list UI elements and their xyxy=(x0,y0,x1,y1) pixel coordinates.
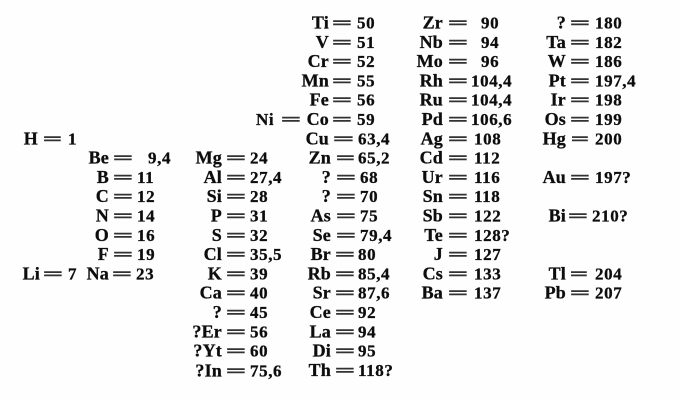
entry: Cl xyxy=(204,244,282,264)
entry: Ti: = xyxy=(332,14,352,32)
entry: F: F xyxy=(98,244,109,264)
entry: C xyxy=(96,186,155,206)
entry: W xyxy=(548,51,622,71)
entry: Ca: Ca xyxy=(200,283,222,303)
entry: Ag: = xyxy=(448,129,468,148)
entry: Na: = xyxy=(112,264,132,283)
entry: Ru: 104,4 xyxy=(471,91,512,110)
entry: Br xyxy=(311,244,376,264)
entry: S: = xyxy=(226,226,246,245)
entry: Li: Li xyxy=(23,263,40,283)
entry: N: N xyxy=(96,206,109,226)
entry: Co xyxy=(307,109,375,129)
entry: Rh: = xyxy=(448,71,468,90)
entry: Ce: 92 xyxy=(358,303,376,322)
entry: ? 180: 180 xyxy=(595,14,622,32)
entry: Pd xyxy=(422,109,512,129)
entry: Tl: Tl xyxy=(549,263,566,283)
entry: Os: Os xyxy=(545,109,566,129)
entry: Ti xyxy=(312,12,375,32)
entry: B: 11 xyxy=(137,168,154,187)
entry: K: = xyxy=(226,264,246,283)
entry: Te xyxy=(424,225,510,245)
entry: J xyxy=(434,244,501,264)
entry: Hg: 200 xyxy=(595,129,622,148)
entry: Ir xyxy=(551,90,622,110)
column: H and Li xyxy=(23,128,77,283)
entry: Ba: = xyxy=(448,284,468,303)
entry: Pt: Pt xyxy=(549,70,566,90)
entry: ? 45: = xyxy=(226,303,246,322)
entry: Ba: Ba xyxy=(422,283,443,303)
entry: Ir: 198 xyxy=(595,91,622,110)
entry: H: = xyxy=(43,129,62,148)
entry: Mn xyxy=(302,70,375,90)
entry: K xyxy=(208,263,268,283)
entry: Tl: = xyxy=(570,264,588,283)
entry: C: 12 xyxy=(137,187,155,206)
entry: Te: Te xyxy=(424,225,443,245)
entry: Ru: = xyxy=(448,91,468,110)
entry: Mg xyxy=(196,148,268,168)
entry: Cu: Cu xyxy=(306,128,329,148)
entry: Fe: = xyxy=(332,91,352,110)
entry: Zr: = xyxy=(448,14,468,32)
entry: K: K xyxy=(208,263,222,283)
entry: J: J xyxy=(434,244,443,264)
entry: K: 39 xyxy=(250,264,268,283)
entry: ? 45 xyxy=(213,302,268,322)
entry: Rh: Rh xyxy=(420,70,443,90)
entry: Na xyxy=(87,263,154,283)
entry: La: La xyxy=(310,321,331,341)
entry: Bi xyxy=(549,206,628,226)
column: Ti to Th xyxy=(302,12,393,380)
entry: Sr: Sr xyxy=(313,283,331,303)
entry: Ta: 182 xyxy=(595,33,622,52)
entry: Rb: Rb xyxy=(308,263,331,283)
entry: As: As xyxy=(311,206,331,226)
entry: Cr: = xyxy=(332,52,352,71)
entry: V xyxy=(316,32,375,52)
entry: ?Yt: = xyxy=(226,342,246,361)
entry: ? 70: 70 xyxy=(360,187,378,206)
entry: Nb: = xyxy=(448,33,468,52)
entry: W: 186 xyxy=(595,52,622,71)
entry: Pd: = xyxy=(448,110,468,129)
entry: Al: Al xyxy=(204,167,222,187)
entry: Sn: Sn xyxy=(423,186,443,206)
entry: J: = xyxy=(448,245,468,264)
entry: Tl: 204 xyxy=(595,264,622,283)
entry: Mg: = xyxy=(226,149,246,168)
entry: C: C xyxy=(96,186,109,206)
entry: ?In: = xyxy=(226,362,246,380)
entry: Rb: 85,4 xyxy=(358,264,390,283)
entry: J: 127 xyxy=(474,245,501,264)
entry: Li: = xyxy=(43,264,63,283)
entry: Tl xyxy=(549,263,622,283)
entry: Cd: Cd xyxy=(420,148,443,168)
entry: Rb: = xyxy=(335,264,355,283)
entry: Al xyxy=(204,167,282,187)
entry: Na: Na xyxy=(87,263,109,283)
entry: Ir: Ir xyxy=(551,90,566,110)
entry: Mo: = xyxy=(448,52,468,71)
entry: H: 1 xyxy=(68,129,77,148)
entry: Fe: 56 xyxy=(357,91,375,110)
entry: Ca xyxy=(200,283,268,303)
entry: V: = xyxy=(332,33,352,52)
entry: Cu xyxy=(306,128,390,148)
entry: Th: = xyxy=(335,361,355,380)
entry: ?Yt: ?Yt xyxy=(193,341,222,361)
column: Mg to In xyxy=(192,148,282,380)
entry: Hg: = xyxy=(571,129,589,148)
entry: Ta: = xyxy=(570,33,590,52)
entry: Ur: 116 xyxy=(474,168,500,187)
entry: As: 75 xyxy=(360,206,378,226)
entry: B: = xyxy=(113,168,133,187)
entry: Pb: = xyxy=(570,284,590,303)
entry: Be: 9,4 xyxy=(148,149,171,168)
entry: Sn xyxy=(423,186,500,206)
entry: Mo: Mo xyxy=(417,51,443,71)
entry: Pt: = xyxy=(570,71,590,90)
entry: Be: = xyxy=(113,149,133,168)
entry: Mo xyxy=(417,51,499,71)
entry: B: B xyxy=(97,167,109,187)
entry: Mn: 55 xyxy=(357,71,375,90)
entry: ?Yt: 60 xyxy=(250,342,268,361)
entry: Si xyxy=(207,186,268,206)
entry: Cs xyxy=(423,263,501,283)
entry: ?In: ?In xyxy=(195,360,222,380)
entry: Li: 7 xyxy=(68,264,77,283)
entry: Mo: 96 xyxy=(481,52,499,71)
entry: Di: = xyxy=(335,342,355,361)
entry: O xyxy=(95,225,155,245)
entry: ? 180 xyxy=(557,12,622,32)
entry: Ag xyxy=(421,128,501,148)
entry: Ur: = xyxy=(448,168,468,187)
entry: Sb: Sb xyxy=(423,206,443,226)
entry: N: 14 xyxy=(137,206,155,226)
entry: Ni: Ni xyxy=(256,110,274,129)
entry: ? 180: ? xyxy=(557,12,566,32)
entry: Pb: 207 xyxy=(595,284,622,303)
entry: Se: = xyxy=(336,226,356,245)
entry: Sr: = xyxy=(335,284,355,303)
entry: Cd: = xyxy=(448,149,468,168)
entry: La xyxy=(310,321,376,341)
entry: Co: = xyxy=(332,110,352,129)
entry: Pb: Pb xyxy=(545,283,566,303)
entry: Pd: 106,6 xyxy=(471,110,512,129)
entry: Sr: 87,6 xyxy=(358,284,390,303)
entry: Pd: Pd xyxy=(422,109,443,129)
entry: S xyxy=(212,225,268,245)
entry: W: W xyxy=(548,51,566,71)
entry: Ba: 137 xyxy=(474,284,501,303)
entry: Si: Si xyxy=(207,186,222,206)
entry: Nb xyxy=(420,32,499,52)
entry: Mg: Mg xyxy=(196,148,222,168)
entry: S: S xyxy=(212,225,222,245)
entry: Co: 59 xyxy=(357,110,375,129)
entry: ?Er: 56 xyxy=(250,322,268,341)
entry: Hg: Hg xyxy=(543,128,566,148)
entry: Cs: = xyxy=(448,264,468,283)
entry: Cs: 133 xyxy=(474,264,501,283)
entry: Ca: 40 xyxy=(250,284,268,303)
entry: Di: Di xyxy=(313,341,331,361)
entry: ? 45: 45 xyxy=(250,303,268,322)
entry: Te: 128? xyxy=(474,226,510,245)
column: Be to Na xyxy=(87,148,171,283)
entry: As: = xyxy=(336,206,356,226)
entry: Sb: 122 xyxy=(474,206,501,226)
entry: ? 70: = xyxy=(336,187,356,206)
entry: Zr: 90 xyxy=(481,14,499,32)
entry: N xyxy=(96,206,155,226)
entry: Sn: 118 xyxy=(474,187,500,206)
entry: W: = xyxy=(570,52,590,71)
entry: ? 68: = xyxy=(336,168,356,187)
entry: Rh: 104,4 xyxy=(471,71,512,90)
entry: Zn: Zn xyxy=(309,148,331,168)
entry: Zn xyxy=(309,148,390,168)
entry: Ni: = xyxy=(281,110,301,129)
entry: P: P xyxy=(211,206,222,226)
entry: Cd: 112 xyxy=(474,149,500,168)
entry: P xyxy=(211,206,268,226)
entry: Ta: Ta xyxy=(546,32,566,52)
entry: ?Er: ?Er xyxy=(192,321,222,341)
entry: ? 45: ? xyxy=(213,302,222,322)
entry: Ni xyxy=(256,110,301,129)
entry: Ca: = xyxy=(226,284,246,303)
entry: Os: 199 xyxy=(595,110,622,129)
entry: B xyxy=(97,167,154,187)
entry: P: 31 xyxy=(250,206,268,226)
entry: Cl: = xyxy=(226,245,246,264)
entry: Sr xyxy=(313,283,390,303)
entry: N: = xyxy=(113,206,133,226)
entry: Ir: = xyxy=(570,91,590,110)
entry: ?Yt xyxy=(193,341,268,361)
entry: Br: 80 xyxy=(358,245,376,264)
entry: H: H xyxy=(24,128,38,148)
entry: Al: 27,4 xyxy=(250,168,282,187)
entry: La: 94 xyxy=(358,322,376,341)
entry: Zr xyxy=(423,12,499,32)
entry: Fe xyxy=(310,90,375,110)
entry: ? 68: ? xyxy=(322,167,331,187)
entry: Zr: Zr xyxy=(423,12,443,32)
entry: Li xyxy=(23,263,77,283)
entry: Cl: 35,5 xyxy=(250,245,282,264)
entry: Br: = xyxy=(335,245,355,264)
entry: ?Er xyxy=(192,321,268,341)
entry: Be xyxy=(89,148,171,168)
entry: ? 70 xyxy=(322,186,378,206)
entry: Se: 79,4 xyxy=(360,226,392,245)
entry: Rb xyxy=(308,263,390,283)
entry: V: V xyxy=(316,32,329,52)
entry: Ce xyxy=(310,302,376,322)
entry: Si: = xyxy=(226,187,246,206)
entry: Au: 197? xyxy=(595,168,631,187)
entry: Au: = xyxy=(570,168,590,187)
entry: Cr: 52 xyxy=(357,52,375,71)
entry: Cr xyxy=(308,51,375,71)
entry: Zn: 65,2 xyxy=(358,149,390,168)
entry: Ti: Ti xyxy=(312,12,329,32)
entry: Ce: = xyxy=(335,303,355,322)
entry: Bi: Bi xyxy=(549,206,566,226)
entry: Se xyxy=(313,225,392,245)
entry: Di: 95 xyxy=(358,342,376,361)
entry: F: 19 xyxy=(137,245,155,264)
entry: F: = xyxy=(113,245,133,264)
entry: Sb xyxy=(423,206,501,226)
entry: Ti: 50 xyxy=(357,14,375,32)
entry: Br: Br xyxy=(311,244,331,264)
entry: Cs: Cs xyxy=(423,263,443,283)
entry: Sb: = xyxy=(448,206,468,226)
entry: Ru xyxy=(420,90,512,110)
entry: Cu: 63,4 xyxy=(358,129,390,148)
entry: Cr: Cr xyxy=(308,51,329,71)
entry: ?In xyxy=(195,360,282,380)
entry: Pt xyxy=(549,70,636,90)
entry: Ce: Ce xyxy=(310,302,331,322)
entry: Co: Co xyxy=(307,109,329,129)
entry: Nb: 94 xyxy=(481,33,499,52)
entry: Di xyxy=(313,341,376,361)
entry: O: 16 xyxy=(137,226,155,245)
entry: Th: Th xyxy=(309,360,331,380)
entry: Ur: Ur xyxy=(422,167,443,187)
column: ? 180 to Pb xyxy=(543,12,636,303)
entry: Pt: 197,4 xyxy=(595,71,636,90)
entry: Os xyxy=(545,109,622,129)
entry: Mn: Mn xyxy=(302,70,329,90)
entry: C: = xyxy=(113,187,133,206)
entry: Au xyxy=(543,167,631,187)
entry: Al: = xyxy=(226,168,246,187)
entry: Ag: 108 xyxy=(474,129,501,148)
entry: Mg: 24 xyxy=(250,149,268,168)
entry: Ba xyxy=(422,283,501,303)
entry: Rh xyxy=(420,70,512,90)
entry: Th xyxy=(309,360,393,380)
entry: ? 180: = xyxy=(570,14,590,32)
entry: V: 51 xyxy=(357,33,375,52)
entry: Ur xyxy=(422,167,500,187)
entry: ? 70: ? xyxy=(322,186,331,206)
entry: Cu: = xyxy=(333,129,354,148)
column: Zr to Ba xyxy=(417,12,512,303)
entry: Cl: Cl xyxy=(204,244,222,264)
entry: ? 68: 68 xyxy=(360,168,378,187)
entry: ?In: 75,6 xyxy=(250,362,282,380)
entry: O: O xyxy=(95,225,109,245)
entry: Ta xyxy=(546,32,622,52)
entry: Ag: Ag xyxy=(421,128,443,148)
entry: O: = xyxy=(113,226,133,245)
entry: Zn: = xyxy=(336,149,355,168)
entry: Os: = xyxy=(570,110,590,129)
entry: Na: 23 xyxy=(136,264,154,283)
entry: Fe: Fe xyxy=(310,90,329,110)
entry: S: 32 xyxy=(250,226,268,245)
entry: Bi: = xyxy=(568,206,588,226)
entry: Ru: Ru xyxy=(420,90,443,110)
entry: H xyxy=(24,128,77,148)
entry: Mn: = xyxy=(332,71,352,90)
entry: Sn: = xyxy=(448,187,468,206)
entry: F xyxy=(98,244,155,264)
entry: ?Er: = xyxy=(226,322,246,341)
entry: P: = xyxy=(226,206,246,226)
entry: Se: Se xyxy=(313,225,331,245)
entry: Te: = xyxy=(448,226,468,245)
entry: Hg xyxy=(543,128,622,148)
entry: As xyxy=(311,206,378,226)
entry: Nb: Nb xyxy=(420,32,443,52)
entry: Pb xyxy=(545,283,622,303)
entry: Si: 28 xyxy=(250,187,268,206)
entry: Cd xyxy=(420,148,500,168)
entry: Bi: 210? xyxy=(592,206,628,226)
entry: Th: 118? xyxy=(358,361,393,380)
entry: La: = xyxy=(335,322,355,341)
entry: Au: Au xyxy=(543,167,566,187)
entry: ? 68 xyxy=(322,167,378,187)
entry: Be: Be xyxy=(89,148,109,168)
